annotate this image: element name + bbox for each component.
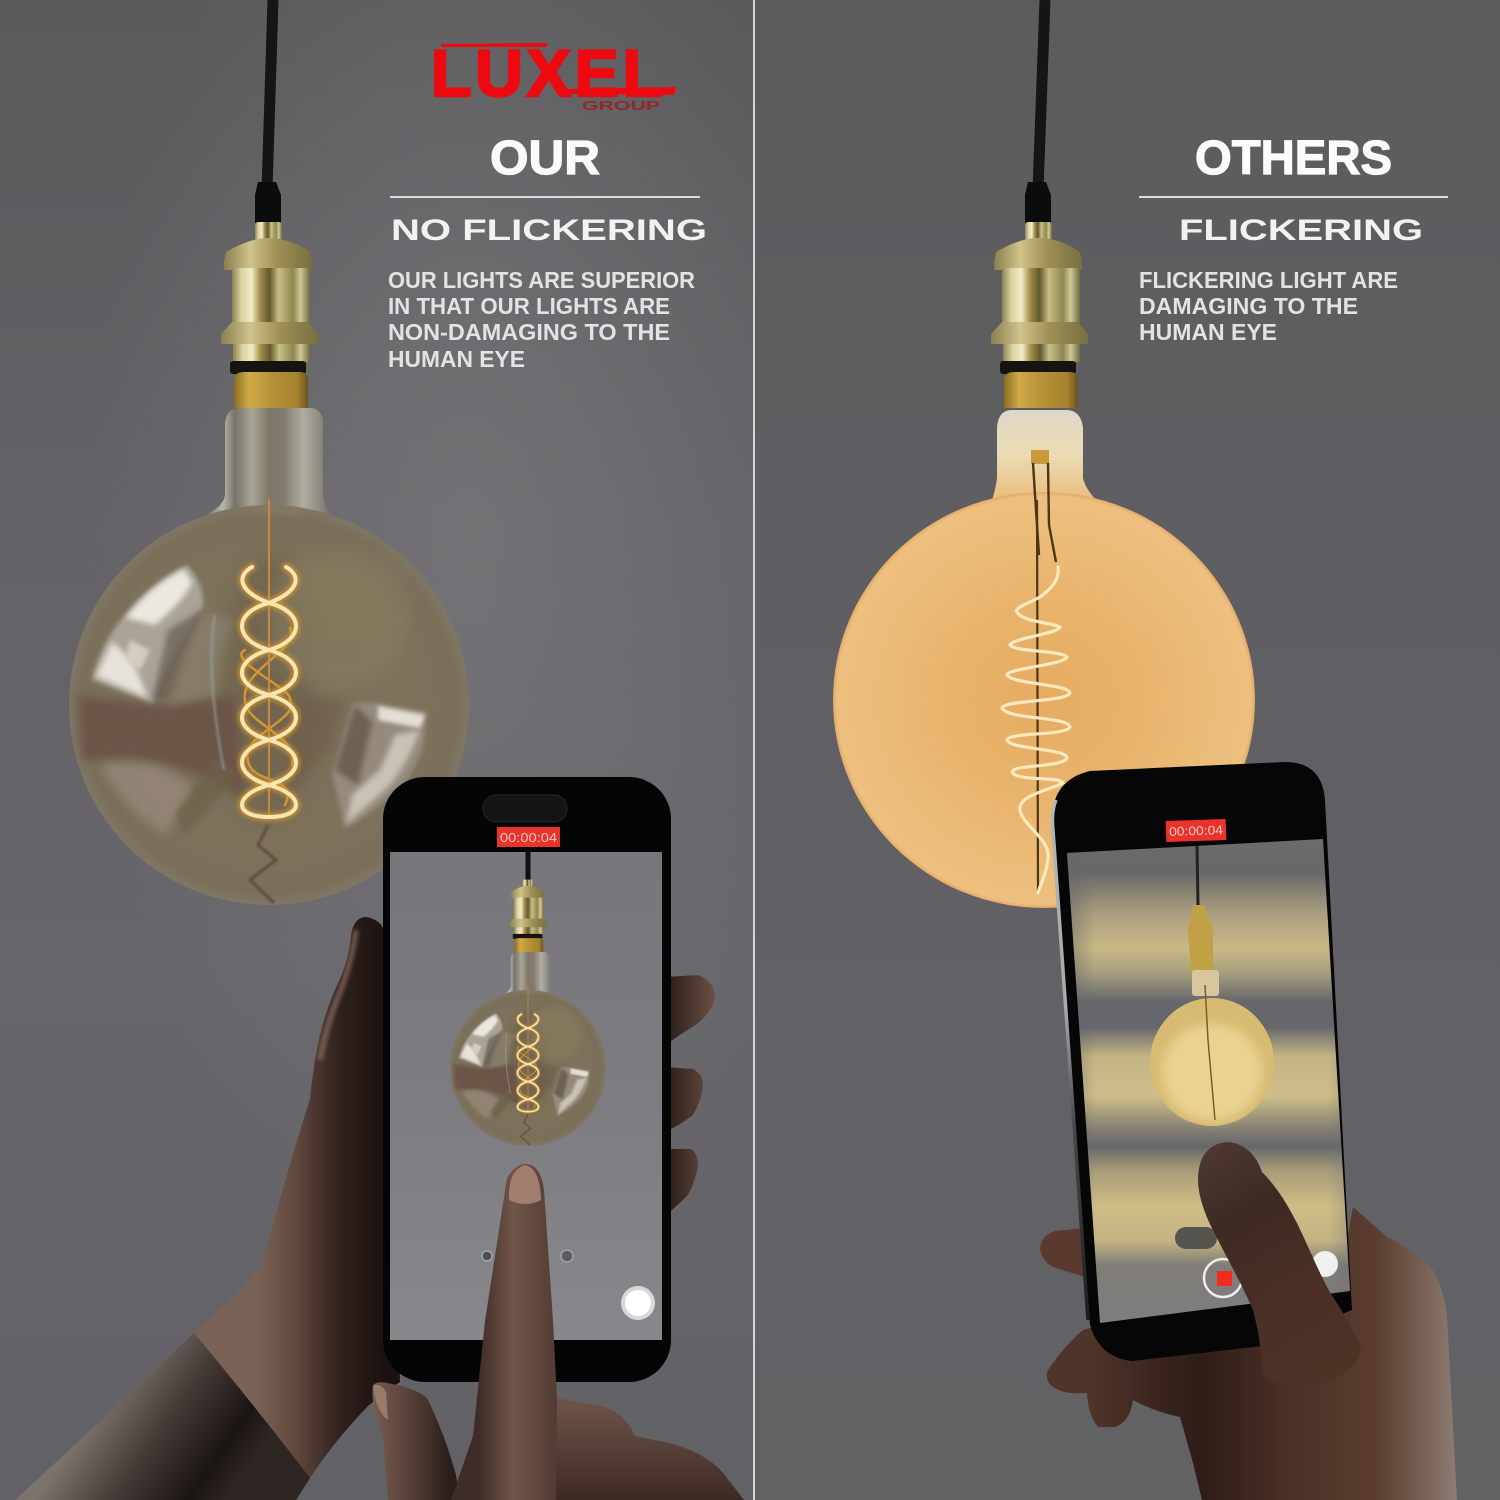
panel: right lamp [833, 0, 1255, 908]
lower fingernail [373, 1385, 388, 1420]
filament supports [1031, 450, 1056, 893]
thumb highlight [320, 930, 356, 1060]
back of pointing hand [500, 1398, 744, 1500]
logo top swoosh [441, 43, 548, 47]
on-screen image: flickering bulb [1150, 845, 1274, 1126]
text block: our lights: OUR LIGHTS ARE SUPERIOR [388, 267, 695, 293]
back finger [1040, 1228, 1088, 1278]
hand: right holding phone [1040, 1207, 1457, 1500]
connector: right [1025, 182, 1051, 223]
on-screen image: steady bulb [450, 852, 606, 1146]
lower finger [372, 1382, 460, 1500]
phone silver edge [1052, 800, 1088, 1320]
bulb: clear glass with double-helix filament [69, 222, 469, 905]
logo: Luxel Group [431, 36, 676, 113]
finger one [665, 975, 715, 1045]
connector: left [255, 182, 281, 223]
panel: right background [755, 0, 1500, 1500]
panel: left lamp [69, 0, 469, 905]
recording timer: 00:00:04 [1169, 823, 1223, 839]
rule: left [390, 196, 700, 198]
pointing finger [451, 1164, 557, 1500]
text block: flickering: HUMAN EYE [1139, 319, 1277, 345]
recording timer: 00:00:04 [500, 831, 557, 845]
panel: left background glow [0, 0, 753, 1500]
phone: left [383, 777, 671, 1382]
thumb [1198, 1142, 1360, 1386]
recording timer [1166, 819, 1226, 842]
heading: OTHERS: OTHERS [1195, 132, 1392, 185]
shutter button [1312, 1251, 1338, 1277]
subheading: FLICKERING: FLICKERING [1179, 214, 1423, 247]
recording timer [497, 827, 560, 847]
filament: single spiral [1002, 567, 1070, 893]
text block: our lights: HUMAN EYE [388, 346, 525, 372]
screen edge shading [1067, 839, 1350, 1323]
hand: left holding phone [15, 917, 715, 1500]
pointing fingernail [509, 1165, 541, 1204]
mini bulb highlight [1162, 1024, 1262, 1120]
rule: right [1139, 196, 1448, 198]
text block: flickering: FLICKERING LIGHT ARE [1139, 267, 1398, 293]
forearm with shadowed wrist [15, 1333, 310, 1500]
camera control pill [1175, 1227, 1217, 1249]
record button [1204, 1259, 1242, 1297]
text block: flickering: DAMAGING TO THE [1139, 293, 1358, 319]
arm and palm [15, 917, 400, 1500]
camera control: right dot [561, 1250, 573, 1262]
cord: right [1038, 0, 1045, 190]
logo wordmark: LUXEL [431, 36, 663, 110]
heading: OUR: OUR [490, 132, 600, 185]
mini filament [1205, 985, 1215, 1120]
phone: right [1052, 762, 1360, 1386]
logo bottom swoosh [565, 87, 676, 95]
finger two [665, 1067, 703, 1132]
camera control: left dot [482, 1251, 492, 1261]
shutter button [623, 1288, 653, 1318]
mini socket [1188, 905, 1213, 972]
phone screen with flicker banding [1067, 839, 1350, 1323]
phone body [383, 777, 671, 1382]
finger three [665, 1149, 698, 1216]
socket: right brass holder [991, 222, 1088, 408]
text block: our lights: IN THAT OUR LIGHTS ARE [388, 293, 670, 319]
logo subtext: GROUP [582, 98, 661, 113]
text block: our lights: NON-DAMAGING TO THE [388, 319, 670, 345]
centre divider [753, 0, 755, 1500]
hand: pointing finger and lower fingers [372, 1164, 744, 1500]
palm and back of hand [1047, 1207, 1457, 1500]
mini bulb glow [1150, 998, 1274, 1126]
subheading: NO FLICKERING: NO FLICKERING [391, 214, 707, 247]
mini cord [1197, 845, 1198, 905]
bulb: glowing amber globe [833, 492, 1255, 908]
dynamic island [483, 795, 567, 822]
panel: left background [0, 0, 753, 1500]
phone body [1052, 762, 1352, 1361]
phone screen [390, 852, 662, 1340]
cord: left [267, 0, 273, 190]
mini neck [1192, 970, 1219, 996]
bulb neck: right [992, 410, 1096, 500]
